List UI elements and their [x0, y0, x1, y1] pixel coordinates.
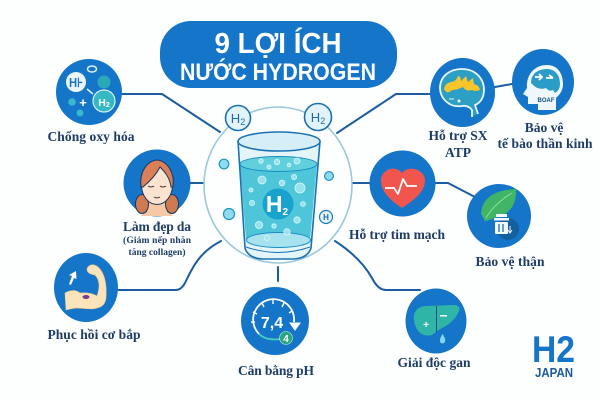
loose bubbles: [219, 159, 333, 220]
H2 bubble left: 2: [240, 117, 245, 127]
H2 bubble right: H: [311, 110, 320, 125]
ring: [204, 107, 352, 263]
title banner: 9 LỢI ÍCH: [214, 26, 342, 60]
H2 bubble left: [226, 106, 250, 130]
benefit: Chống oxy hóa: [48, 59, 135, 144]
icon: heart: [370, 150, 436, 216]
glass of water: [238, 132, 320, 259]
icon: pH gauge: 4: [283, 334, 289, 345]
logo: H2 Japan: JAPAN: [535, 366, 573, 380]
H bubble small: [320, 210, 332, 224]
icon: head with neurons: BOAF: [538, 98, 555, 104]
benefit: Làm đẹp da: Làm đẹp da: [123, 219, 191, 234]
icon: brain: [430, 58, 495, 127]
benefit: Hỗ trợ tim mạch: Hỗ trợ tim mạch: [349, 227, 445, 242]
benefit: Bảo vệ thận: Bảo vệ thận: [476, 254, 545, 269]
title banner: [160, 21, 397, 88]
benefit: Cân bằng pH: Cân bằng pH: [238, 363, 314, 378]
benefit: Bảo vệ tế bào thần kinh: Bảo vệ: [525, 120, 563, 135]
icon: liver: +: [423, 320, 429, 331]
H2 bubble right: 2: [320, 116, 325, 126]
title banner: NƯỚC HYDROGEN: [180, 58, 376, 86]
benefit: Bảo vệ tế bào thần kinh: tế bào thần kinh: [498, 136, 593, 151]
benefit: Hỗ trợ SX ATP: Hỗ trợ SX: [428, 128, 488, 143]
H2 badge: 2: [283, 207, 289, 218]
benefit: Bảo vệ tế bào thần kinh: [498, 49, 593, 151]
benefit: Phục hồi cơ bắp: Phục hồi cơ bắp: [48, 327, 140, 342]
benefit: Cân bằng pH: [238, 287, 314, 378]
icon: molecules: H⊦: [69, 75, 83, 90]
benefit: Làm đẹp da: (Giảm nếp nhăn: [123, 235, 192, 246]
logo: H2 Japan: H2: [532, 329, 575, 370]
H bubble small: H: [323, 213, 329, 222]
benefit: Làm đẹp da: [123, 150, 192, 258]
icon: molecules: H: [98, 97, 106, 109]
icon: pH gauge: 7,4: [261, 315, 283, 332]
icon: molecules: +: [79, 95, 87, 110]
benefit: Hỗ trợ SX ATP: [428, 58, 495, 160]
H2 bubble right: [304, 104, 332, 130]
benefit: Giải độc gan: Giải độc gan: [398, 355, 471, 370]
icon: pH gauge: [241, 287, 309, 355]
H2 badge: [262, 188, 294, 220]
icon: woman's face: [124, 150, 190, 216]
central ring with glass: [204, 104, 352, 263]
benefit: Chống oxy hóa: Chống oxy hóa: [48, 129, 135, 144]
icon: flexed arm: [54, 253, 118, 322]
H2 badge: H: [266, 191, 283, 217]
water bubbles: [249, 158, 305, 240]
benefit: Làm đẹp da: tăng collagen): [128, 247, 186, 258]
benefit: Bảo vệ thận: [467, 184, 545, 269]
connector lines: [118, 84, 512, 290]
benefit: Phục hồi cơ bắp: [48, 253, 140, 342]
icon: molecules: 2: [106, 102, 110, 109]
benefit: Hỗ trợ tim mạch: [349, 150, 445, 242]
icon: molecules: [56, 59, 122, 125]
benefit: Hỗ trợ SX ATP: ATP: [445, 145, 471, 160]
benefit: Giải độc gan: [398, 288, 471, 370]
H2 bubble left: H: [231, 111, 240, 126]
icon: leaf and bin: [467, 184, 531, 248]
